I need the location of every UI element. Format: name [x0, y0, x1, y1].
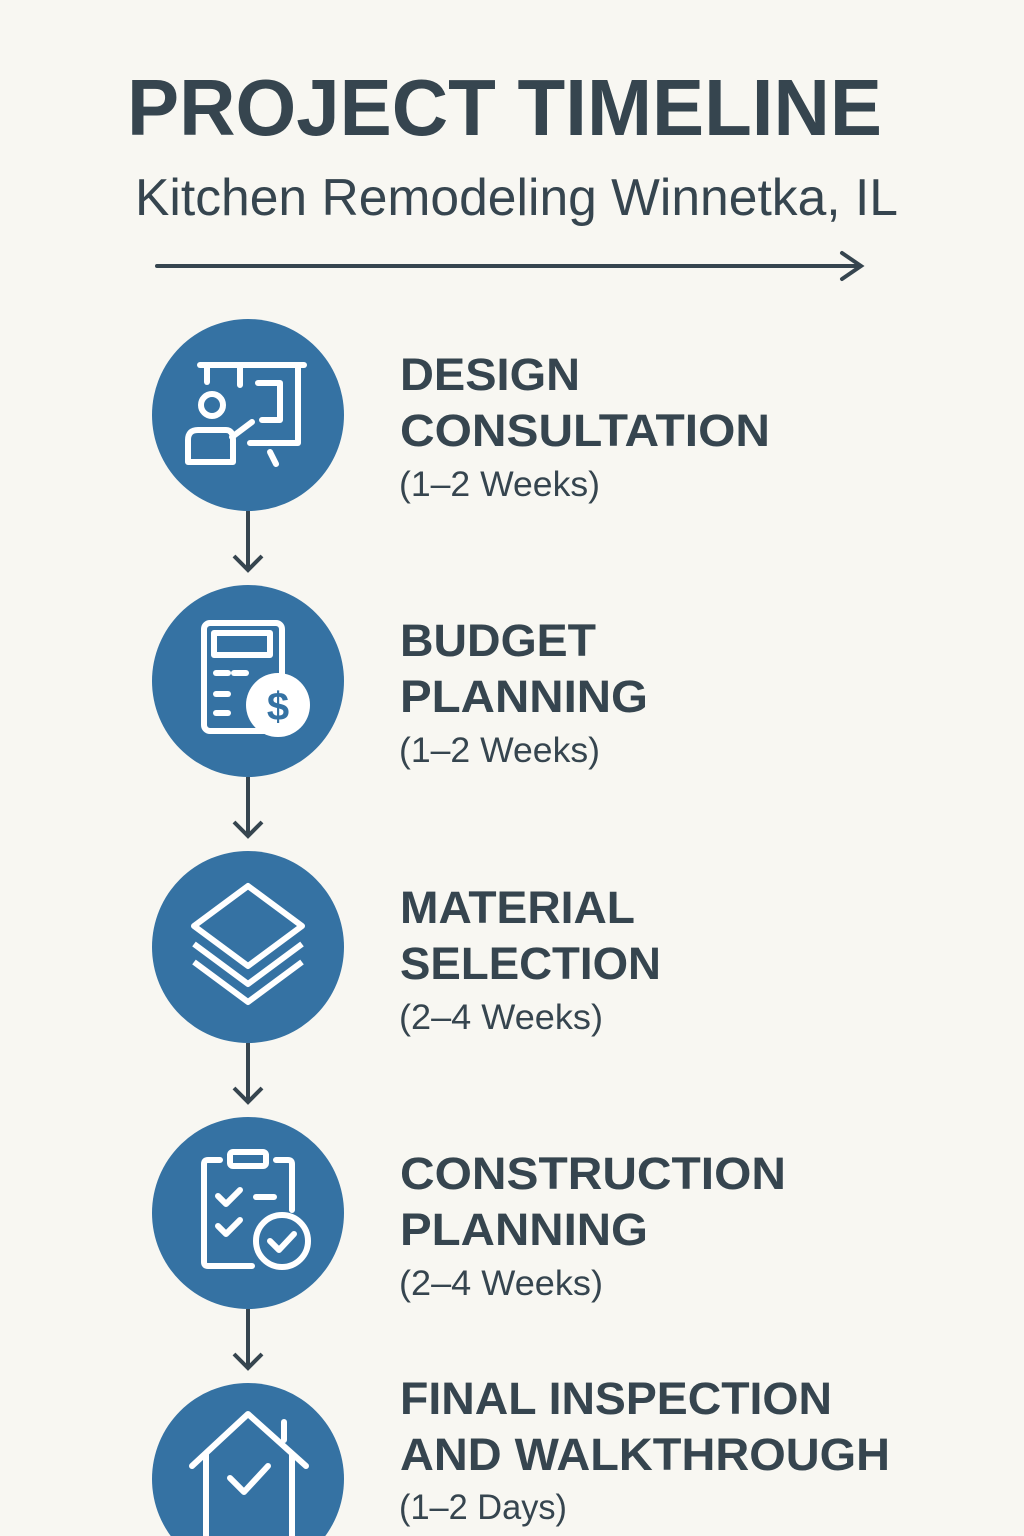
subtitle: Kitchen Remodeling Winnetka, IL: [135, 169, 898, 227]
text: budget planning: [399, 615, 648, 770]
step 5: final inspection: [152, 1373, 890, 1536]
icon: layers: [152, 851, 344, 1043]
text: construction planning: CONSTRUCTION: [400, 1148, 786, 1199]
icon: calculator: [152, 585, 344, 777]
arrow: 4 to 5: [234, 1309, 262, 1368]
step 1: design consultation: [152, 319, 770, 511]
icon: presentation: [152, 319, 344, 511]
icon: clipboard checklist: [152, 1117, 344, 1309]
text: construction planning: [399, 1148, 786, 1303]
text: material selection: MATERIAL: [400, 882, 635, 933]
text: material selection: (2–4 Weeks): [399, 998, 603, 1037]
text: budget planning: PLANNING: [400, 671, 648, 722]
text: construction planning: (2–4 Weeks): [399, 1264, 603, 1303]
icon: house check: [152, 1383, 344, 1536]
text: construction planning: PLANNING: [400, 1204, 648, 1255]
arrow: timeline: [157, 253, 861, 279]
title: PROJECT TIMELINE: [127, 63, 882, 152]
text: design consultation: (1–2 Weeks): [399, 465, 600, 504]
text: design consultation: CONSULTATION: [400, 405, 770, 456]
text: final inspection: AND WALKTHROUGH: [400, 1429, 890, 1480]
arrow: 2 to 3: [234, 777, 262, 836]
arrow: 3 to 4: [234, 1043, 262, 1102]
text: final inspection: FINAL INSPECTION: [400, 1373, 832, 1424]
text: budget planning: BUDGET: [400, 615, 596, 666]
text: final inspection: [399, 1373, 890, 1527]
text: design consultation: [399, 349, 770, 504]
step 2: budget planning: [152, 585, 648, 777]
step 3: material selection: [152, 851, 661, 1043]
text: budget planning: (1–2 Weeks): [399, 731, 600, 770]
step 4: construction planning: [152, 1117, 786, 1309]
text: final inspection: (1–2 Days): [399, 1488, 567, 1527]
text: material selection: SELECTION: [400, 938, 661, 989]
text: design consultation: DESIGN: [400, 349, 580, 400]
icon: calculator: $: [267, 685, 289, 729]
arrow: 1 to 2: [234, 511, 262, 570]
text: material selection: [399, 882, 661, 1037]
